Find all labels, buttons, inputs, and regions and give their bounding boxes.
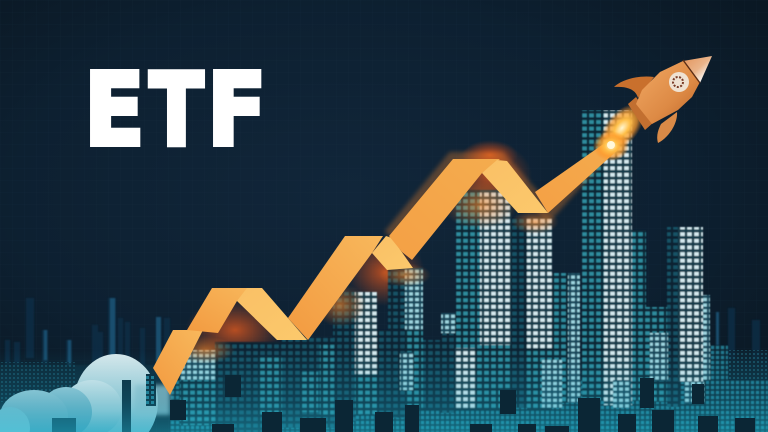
foreground silhouettes — [170, 375, 755, 432]
arrow glow — [390, 155, 600, 236]
arrow final rise — [535, 138, 620, 213]
clouds — [0, 354, 170, 432]
rocket — [614, 56, 712, 143]
arrow first fall — [237, 288, 307, 340]
title: T — [149, 53, 204, 169]
orange light on tower tops — [175, 181, 559, 364]
red glow behind arrow — [185, 140, 532, 362]
tower: mid left — [388, 268, 456, 418]
low base filler — [170, 380, 768, 432]
rocket nose cone — [683, 56, 712, 83]
rocket flame — [592, 96, 652, 161]
rocket porthole — [669, 72, 689, 92]
tower: centre right — [511, 218, 552, 410]
rocket nozzle — [628, 97, 654, 130]
tower: low left cluster — [180, 338, 334, 432]
rocket top fin — [614, 76, 654, 98]
arrow third rise — [389, 159, 500, 260]
distant window texture — [0, 350, 768, 410]
tower: side mid — [552, 273, 668, 403]
bottom cyan glow — [0, 350, 768, 432]
tower: far right edge — [710, 345, 728, 405]
rocket lower fin — [657, 112, 677, 143]
title: E — [84, 52, 145, 169]
arrow second rise — [288, 236, 383, 340]
title — [84, 52, 266, 169]
arrow second fall — [372, 236, 413, 270]
city — [170, 110, 768, 432]
rocket body — [636, 61, 700, 124]
tower: left — [333, 292, 389, 422]
arrow tail segment — [153, 330, 203, 395]
arrow third fall — [482, 160, 548, 213]
arrow first rise — [187, 288, 260, 333]
tower: tallest — [582, 110, 646, 405]
title: F — [207, 53, 266, 169]
foreground towers — [300, 348, 704, 412]
arrow — [153, 138, 620, 395]
tower: right tall — [667, 227, 710, 407]
tower: centre left — [456, 190, 511, 410]
rocket nose band — [683, 60, 700, 83]
distant skyline — [0, 298, 768, 420]
